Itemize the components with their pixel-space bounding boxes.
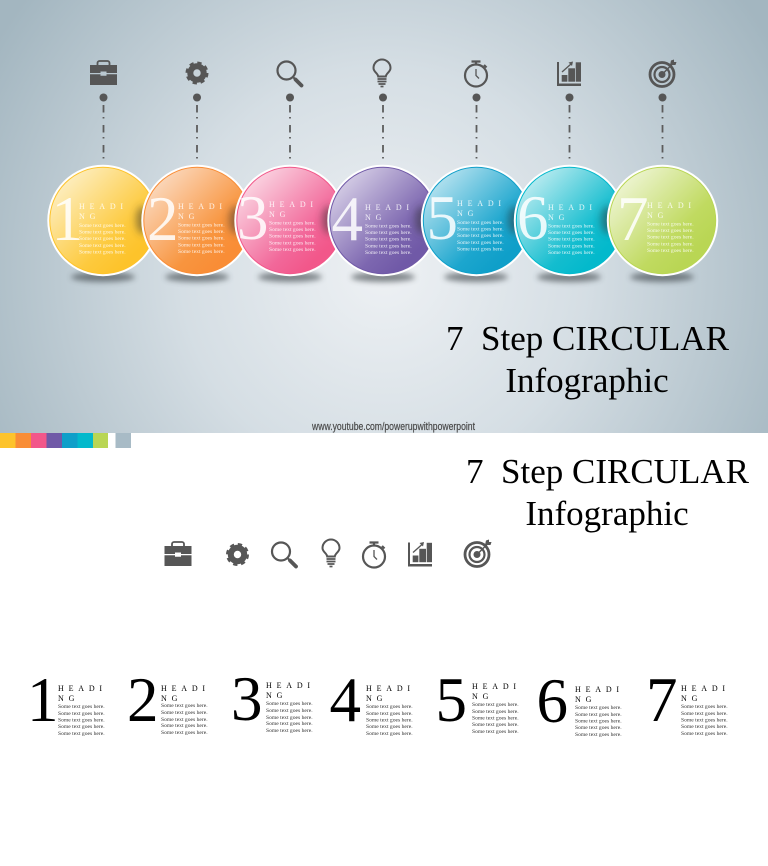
text block 4: HEADI	[366, 684, 415, 693]
text block 7: Some text goes here.	[681, 718, 728, 724]
icon: gear	[228, 544, 248, 564]
text block 1: Some text goes here.	[58, 704, 105, 710]
icon: briefcase	[164, 542, 192, 566]
text block 1: HEADI	[58, 684, 107, 693]
step circle 3: Some text goes here.	[269, 227, 316, 233]
step circle 3: HEADI	[269, 200, 318, 209]
step circle 3: Some text goes here.	[269, 220, 316, 226]
step circle 5: Some text goes here.	[457, 220, 504, 226]
text block 1: Some text goes here.	[58, 731, 105, 737]
text block 2: Some text goes here.	[161, 723, 208, 729]
step circle 2: NG	[178, 212, 199, 221]
title	[446, 319, 730, 400]
step circle 1: HEADI	[79, 202, 128, 211]
text block 4: Some text goes here.	[366, 724, 413, 730]
text block 2: NG	[161, 694, 182, 703]
step circle 3: Some text goes here.	[269, 240, 316, 246]
step circle 4: NG	[365, 213, 386, 222]
text block 6: Some text goes here.	[575, 705, 622, 711]
step circle 5: HEADI	[457, 199, 506, 208]
step circle 2: Some text goes here.	[178, 222, 225, 228]
text block 4: NG	[366, 694, 387, 703]
step circle 3: Some text goes here.	[269, 247, 316, 253]
text block 2: HEADI	[161, 684, 210, 693]
step circle 7: Some text goes here.	[647, 248, 694, 254]
step circle 1: Some text goes here.	[79, 223, 126, 229]
text block 2: Some text goes here.	[161, 730, 208, 736]
text block 2: 2	[127, 665, 158, 735]
text block 7: 7	[646, 665, 678, 735]
icon: light bulb	[374, 60, 390, 86]
step circle 6: Some text goes here.	[548, 250, 595, 256]
step circle 3: NG	[269, 210, 290, 219]
step circle 6: 6	[517, 183, 548, 253]
step circle 4: Some text goes here.	[365, 230, 412, 236]
icon: stopwatch	[363, 542, 385, 568]
title: Infographic	[505, 361, 669, 400]
text block 6	[536, 666, 624, 738]
step circle 7	[601, 166, 717, 282]
step circle 7: Some text goes here.	[647, 222, 694, 228]
step circle 5: Some text goes here.	[457, 226, 504, 232]
icon: stopwatch	[465, 62, 487, 86]
text block 2: Some text goes here.	[161, 717, 208, 723]
step circle 6: HEADI	[548, 203, 597, 212]
step circle 2: HEADI	[178, 202, 227, 211]
step circle 2: Some text goes here.	[178, 249, 225, 255]
text block 4: Some text goes here.	[366, 718, 413, 724]
connector 5	[472, 94, 480, 164]
text block 5: Some text goes here.	[472, 709, 519, 715]
step circle 2: 2	[147, 184, 178, 254]
text block 4: Some text goes here.	[366, 704, 413, 710]
text block 6: HEADI	[575, 685, 624, 694]
step circle 6: NG	[548, 213, 569, 222]
text block 3: Some text goes here.	[266, 701, 313, 707]
step circle 1: Some text goes here.	[79, 250, 126, 256]
step circle 3: Some text goes here.	[269, 234, 316, 240]
text block 5: Some text goes here.	[472, 716, 519, 722]
text block 3: 3	[231, 664, 262, 734]
step circle 7: 7	[617, 184, 648, 254]
icon: target	[650, 60, 676, 86]
step circle 5: 5	[426, 183, 458, 253]
step circle 2: Some text goes here.	[178, 236, 225, 242]
step circle 5: Some text goes here.	[457, 246, 504, 252]
step circle 1	[48, 166, 158, 282]
text block 3: NG	[266, 691, 287, 700]
step circle 2: Some text goes here.	[178, 242, 225, 248]
text block 5: Some text goes here.	[472, 722, 519, 728]
icon: bar chart	[408, 542, 432, 566]
title copy: 7 Step CIRCULAR	[466, 452, 750, 491]
text block 1: Some text goes here.	[58, 718, 105, 724]
connector 1	[100, 94, 108, 164]
connector 6	[566, 94, 574, 164]
text block 3: Some text goes here.	[266, 721, 313, 727]
step circle 6: Some text goes here.	[548, 236, 595, 242]
step circle 1: Some text goes here.	[79, 236, 126, 242]
colour swatch strip	[0, 433, 131, 448]
text block 4: Some text goes here.	[366, 711, 413, 717]
text block 3: Some text goes here.	[266, 728, 313, 734]
text block 7: Some text goes here.	[681, 704, 728, 710]
text block 7: HEADI	[681, 684, 730, 693]
step circle 6: Some text goes here.	[548, 230, 595, 236]
text block 6: NG	[575, 695, 596, 704]
step circle 4	[322, 166, 438, 282]
icon row: loose icons	[164, 540, 492, 568]
text block 2	[127, 665, 210, 736]
text block 6: Some text goes here.	[575, 712, 622, 718]
text block 1: NG	[58, 694, 79, 703]
connector 3	[286, 94, 294, 164]
step circle 4: Some text goes here.	[365, 250, 412, 256]
step circle 7: Some text goes here.	[647, 234, 694, 240]
text block 6: Some text goes here.	[575, 718, 622, 724]
icon: bar chart	[557, 62, 581, 86]
background panel	[0, 0, 768, 433]
title: 7 Step CIRCULAR	[446, 319, 730, 358]
text block 1: Some text goes here.	[58, 724, 105, 730]
step circle 1: Some text goes here.	[79, 230, 126, 236]
text block 4: Some text goes here.	[366, 731, 413, 737]
step circle 4: 4	[332, 184, 363, 254]
text block 6: Some text goes here.	[575, 732, 622, 738]
step circle 5	[415, 166, 531, 282]
text block 4	[330, 665, 415, 737]
text block 6: Some text goes here.	[575, 725, 622, 731]
step circle 5: Some text goes here.	[457, 240, 504, 246]
step circle 2	[136, 166, 252, 282]
text block 5: Some text goes here.	[472, 729, 519, 735]
text block 5: 5	[436, 665, 467, 735]
watermark url: www.youtube.com/powerupwithpowerpoint	[311, 421, 475, 433]
text block 1: Some text goes here.	[58, 711, 105, 717]
text block 3: HEADI	[266, 681, 315, 690]
text block 1: 1	[27, 665, 58, 735]
step circle 7: Some text goes here.	[647, 242, 694, 248]
text block 7: Some text goes here.	[681, 711, 728, 717]
step circle 4: Some text goes here.	[365, 244, 412, 250]
text block 1	[27, 665, 107, 737]
icon: target	[465, 540, 492, 566]
step circle 6: Some text goes here.	[548, 244, 595, 250]
step circle 3: 3	[237, 183, 268, 253]
text block 5: NG	[472, 692, 493, 701]
icon: light bulb	[322, 540, 340, 566]
connector 7	[658, 94, 666, 164]
step circle 3	[229, 166, 345, 282]
connector 4	[379, 94, 387, 164]
text block 6: 6	[536, 666, 568, 736]
step circle 5: NG	[457, 209, 478, 218]
step circle 4: Some text goes here.	[365, 224, 412, 230]
text block 2: Some text goes here.	[161, 703, 208, 709]
step circle 2: Some text goes here.	[178, 229, 225, 235]
step circle 7: NG	[647, 211, 668, 220]
connector 2	[193, 94, 201, 164]
step circle 1: 1	[52, 184, 83, 254]
step circle 7: HEADI	[647, 201, 696, 210]
title copy: Infographic	[525, 494, 689, 533]
icon: magnifier	[278, 62, 302, 86]
icon: gear	[187, 63, 207, 83]
text block 5: HEADI	[472, 682, 521, 691]
step circle 7: Some text goes here.	[647, 228, 694, 234]
text block 2: Some text goes here.	[161, 710, 208, 716]
text block 3: Some text goes here.	[266, 715, 313, 721]
title copy	[466, 452, 750, 533]
icon: magnifier	[272, 542, 296, 566]
step circle 1: NG	[79, 212, 100, 221]
step circle 6	[508, 166, 624, 282]
step circle 1: Some text goes here.	[79, 243, 126, 249]
text block 7: Some text goes here.	[681, 731, 728, 737]
text block 5: Some text goes here.	[472, 702, 519, 708]
text block 7: Some text goes here.	[681, 724, 728, 730]
text block 3: Some text goes here.	[266, 708, 313, 714]
step circle 4: HEADI	[365, 203, 414, 212]
step circle 4: Some text goes here.	[365, 236, 412, 242]
text block 7: NG	[681, 694, 702, 703]
step circle 6: Some text goes here.	[548, 224, 595, 230]
text block 3	[231, 664, 315, 734]
text block 4: 4	[330, 665, 361, 735]
step circle 5: Some text goes here.	[457, 233, 504, 239]
icon: briefcase	[90, 61, 117, 85]
text block 5	[436, 665, 521, 735]
text block 7	[646, 665, 730, 737]
